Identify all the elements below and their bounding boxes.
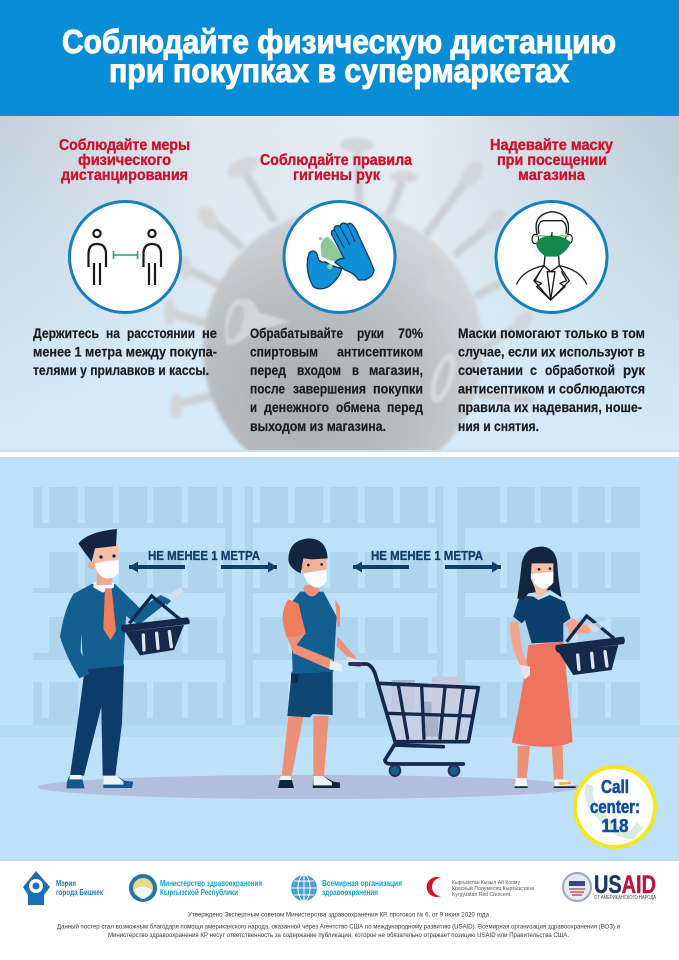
text: masks [458, 325, 646, 434]
approval note: Утверждено Экспертным советом Министерства здравоохранения КР, протокол № 6, от 9 июня 2020 года [188, 912, 490, 918]
disclaimer [57, 924, 620, 939]
logo: World Health Organization [291, 875, 402, 901]
text: sanitise hands: после [250, 380, 285, 396]
text: keep distance: Держитесь [33, 325, 99, 341]
text: sanitise hands: 70% [398, 325, 423, 341]
label: arrows at least 1 metre, left: НЕ МЕНЕЕ 1 МЕТРА [148, 548, 261, 563]
text: masks: рук [623, 362, 646, 378]
floor shadow [38, 775, 582, 799]
icon: two people at a distance [70, 202, 180, 312]
disclaimer: Министерство здравоохранения КР несут ответственность за содержание публикации, которое не обязательно отражает позицию USAID или Правительства США. [108, 933, 569, 939]
label: arrows at least 1 metre, left [129, 548, 277, 572]
logo: World Health Organization: Всемирная организация [322, 879, 402, 888]
text: sanitise hands: перед [387, 399, 423, 415]
logo: Red Crescent: Kyrgyzstan Red Crescent [452, 892, 511, 898]
logo: Ministry of Health: Кыргызской Республики [160, 888, 238, 897]
heading: mask [490, 137, 613, 184]
text: sanitise hands: обмена [336, 399, 380, 415]
title: Соблюдайте физическую дистанцию [62, 23, 616, 60]
figure: boy with cart [278, 538, 362, 788]
header banner [0, 0, 679, 116]
text: masks: обработкой [545, 362, 615, 378]
logo: Red Crescent: Кыргызстан Кызыл Ай Коому [452, 879, 520, 886]
icon: shopping cart [348, 662, 478, 776]
heading: distancing [59, 137, 190, 184]
logo: World Health Organization: здравоохранения [322, 888, 378, 897]
text: keep distance: телями у прилавков и кассы. [33, 362, 209, 378]
text: masks: с [530, 362, 537, 378]
title: при покупках в супермаркетах [109, 52, 570, 89]
text: sanitise hands: покупки [373, 380, 423, 396]
panel: supermarket queue scene [0, 457, 679, 861]
text: masks: ния и снятия. [458, 418, 539, 434]
text: masks: правила их надевания, ноше- [458, 399, 642, 415]
column: hand hygiene [250, 152, 423, 434]
text: sanitise hands: руки [357, 325, 384, 341]
logo: Ministry of Health [129, 874, 262, 902]
logo: USAID: USAID [594, 871, 656, 899]
text: sanitise hands: выходом из магазина. [250, 418, 386, 434]
text: keep distance: менее 1 метра между покупа- [33, 344, 217, 360]
icon: person with mask [496, 202, 607, 312]
text: masks: случае, если их используют в [458, 344, 645, 360]
logo: Bishkek mayor's office: Мэрия [56, 879, 76, 888]
column: physical distancing [33, 137, 217, 378]
logo: Bishkek mayor's office [23, 871, 104, 905]
logo: Red Crescent [427, 877, 534, 898]
heading: mask: Надевайте маску [490, 137, 613, 154]
text: masks: антисептиком и соблюдаются [458, 380, 645, 396]
text: sanitise hands: Обрабатывайте [250, 325, 343, 341]
text: masks: Маски помогают только в том [458, 325, 645, 341]
badge: call center 118 [575, 767, 655, 847]
icon: gloved hands [284, 202, 395, 312]
text: sanitise hands: антисептиком [337, 344, 423, 360]
label: arrows at least 1 metre, right [353, 548, 501, 572]
disclaimer: Данный постер стал возможным благодаря помощи американского народа, оказанной через Агентство США по международному развитию (USAID). Всемирная организация здравоохранения (ВОЗ) и [57, 924, 620, 930]
figure: man with basket [60, 529, 190, 788]
heading: distancing: физического [78, 152, 171, 169]
title [62, 23, 616, 89]
text: sanitise hands: денежного [264, 399, 329, 415]
text: keep distance: не [202, 325, 217, 341]
text: sanitise hands: завершения [293, 380, 366, 396]
heading: hand hygiene: гигиены рук [293, 167, 381, 184]
panel: hygiene recommendations background [0, 116, 679, 452]
heading: mask: при посещении [497, 152, 607, 169]
logo: USAID [563, 871, 657, 901]
heading: hand hygiene [260, 152, 412, 184]
text: masks: сочетании [458, 362, 523, 378]
badge: call center 118: 118 [602, 816, 628, 836]
text: keep distance: расстоянии [127, 325, 195, 341]
logo: Ministry of Health: Министерство здравоохранения [160, 879, 262, 888]
footer [0, 861, 679, 960]
text: sanitise hands: спиртовым [250, 344, 318, 360]
text: sanitise hands: и [250, 399, 257, 415]
heading: hand hygiene: Соблюдайте правила [260, 152, 412, 169]
text: keep distance [33, 325, 217, 378]
text: sanitise hands: магазин, [369, 362, 423, 378]
text: sanitise hands: в [352, 362, 359, 378]
text: sanitise hands: входом [297, 362, 341, 378]
column: face mask [458, 137, 646, 434]
heading: mask: магазина [518, 167, 585, 184]
text: keep distance: на [106, 325, 120, 341]
logo: Red Crescent: Красный Полумесяц Кыргызстана [452, 885, 534, 892]
label: arrows at least 1 metre, right: НЕ МЕНЕЕ 1 МЕТРА [371, 548, 484, 563]
text: sanitise hands [250, 325, 423, 434]
logo: Bishkek mayor's office: города Бишкек [56, 888, 104, 897]
supermarket shelves background [0, 487, 679, 737]
badge: call center 118: center: [590, 797, 640, 817]
text: sanitise hands: перед [250, 362, 286, 378]
badge: call center 118: Call [601, 777, 629, 797]
illustration: blurred coronavirus [164, 138, 535, 450]
logo: USAID: ОТ АМЕРИКАНСКОГО НАРОДА [594, 895, 657, 901]
heading: distancing: дистанцирования [61, 167, 188, 184]
figure: woman with basket [510, 547, 625, 788]
heading: distancing: Соблюдайте меры [59, 137, 190, 154]
